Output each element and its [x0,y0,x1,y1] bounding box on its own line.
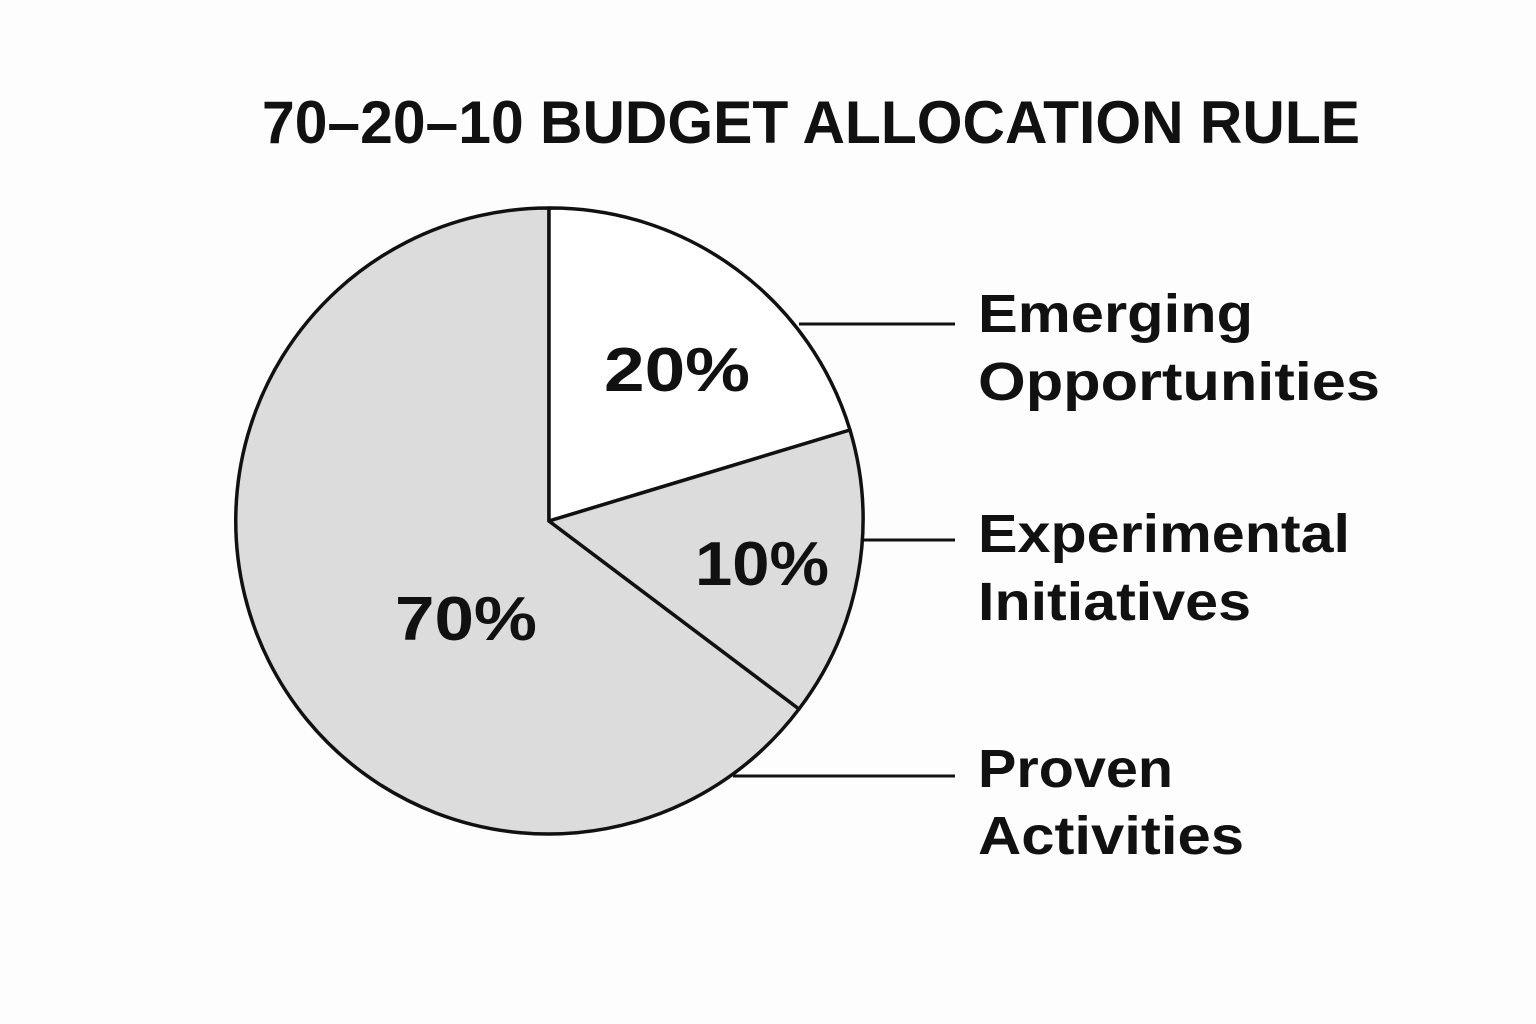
slice: 20% emerging [549,208,850,521]
title: 70–20–10 BUDGET ALLOCATION RULE [262,89,1360,156]
label: Emerging Opportunities: Opportunities [978,352,1380,412]
label: Experimental Initiatives: Initiatives [978,572,1251,632]
label: Emerging Opportunities [978,284,1380,412]
label: Proven Activities [978,739,1244,866]
label: Proven Activities: Proven [978,739,1173,799]
leader lines [733,324,955,776]
label: Experimental Initiatives: Experimental [978,504,1350,564]
slice: 70% proven [236,208,799,834]
label: 10%: 10% [695,530,829,599]
slice: 10% experimental [549,430,863,709]
label: Proven Activities: Activities [978,806,1244,866]
label: 20%: 20% [604,336,750,405]
label: 70%: 70% [395,585,537,654]
pie chart [236,208,863,834]
label: Experimental Initiatives [978,504,1350,632]
label: Emerging Opportunities: Emerging [978,284,1253,344]
